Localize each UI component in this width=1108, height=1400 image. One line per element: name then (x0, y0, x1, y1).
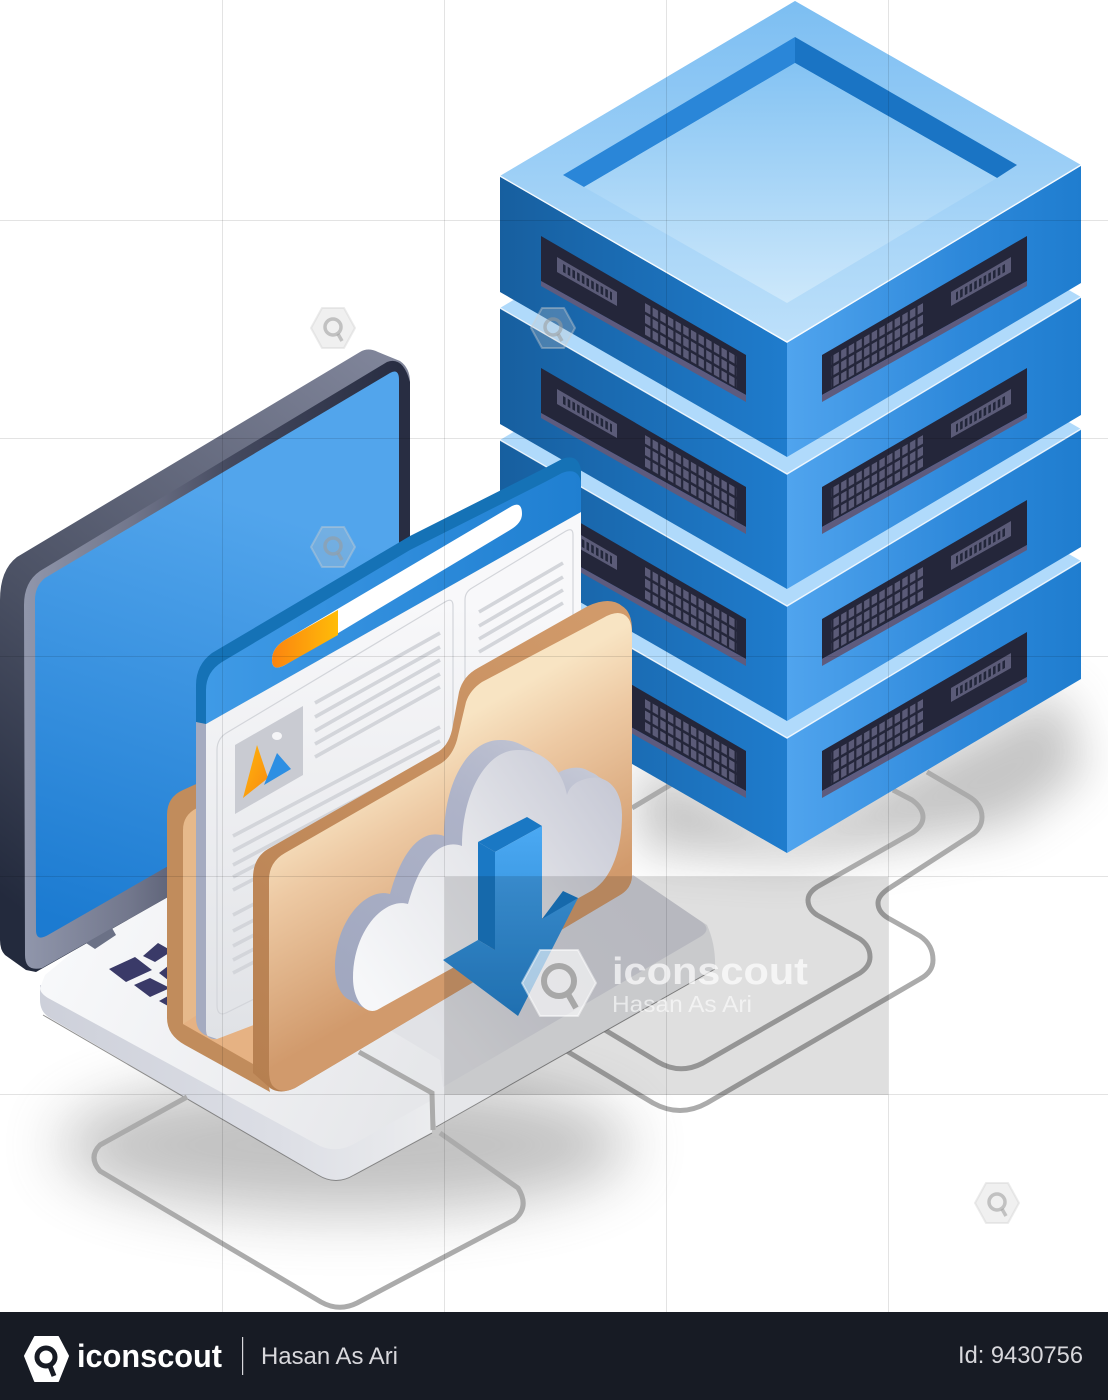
footer id: Id: 9430756 (958, 1342, 1083, 1369)
base edge line (43, 969, 715, 1180)
document folder group (167, 457, 632, 1092)
watermark author: Hasan As Ari (612, 991, 752, 1017)
watermark overlay square (445, 877, 888, 1095)
base side (40, 985, 432, 1180)
footer author: Hasan As Ari (261, 1343, 398, 1370)
footer bar (0, 1312, 1108, 1400)
watermark name: iconscout (612, 951, 808, 993)
address bar (272, 505, 522, 668)
side content panel (465, 530, 573, 760)
laptop monitor (0, 350, 410, 972)
folder shadow on base (390, 875, 707, 1087)
server unit 1 (500, 1, 1081, 457)
window outer band (196, 457, 581, 726)
watermark icon 4 (975, 1183, 1019, 1223)
browser window (196, 457, 581, 1039)
download arrow (443, 817, 578, 1016)
cloud depth (335, 740, 616, 1008)
address bar progress (272, 610, 338, 668)
circuit wires: server (565, 772, 982, 1110)
image thumbnail (235, 706, 303, 814)
folder back panel (167, 780, 270, 1092)
server top face (500, 1, 1081, 342)
wire across the base (359, 1052, 433, 1130)
base top surface (40, 870, 715, 1149)
server stack (500, 1, 1081, 853)
folder front rim (253, 601, 632, 1092)
large watermark hexagon (522, 950, 596, 1016)
footer divider (242, 1337, 243, 1375)
side text lines (479, 563, 563, 652)
server unit 3 (500, 265, 1081, 721)
cloud (335, 740, 622, 1011)
large watermark logo (522, 950, 808, 1017)
laptop base (40, 870, 715, 1180)
server unit 4 (500, 397, 1081, 853)
window side edge (196, 722, 217, 1039)
watermark icon 1 (311, 308, 355, 348)
watermark icon 2 (531, 308, 575, 348)
circuit wire: laptop (94, 1097, 523, 1307)
server unit 2 (500, 133, 1081, 589)
monitor screen (35, 372, 399, 938)
cloud front (353, 750, 622, 1011)
shadow: laptop (60, 1077, 630, 1213)
watermark icon 3 (311, 527, 355, 567)
folder front face (269, 613, 632, 1091)
main text lines (233, 633, 440, 973)
window body (206, 512, 581, 1039)
main content panel (217, 600, 453, 1014)
window header (206, 471, 581, 724)
monitor rear edge (0, 350, 410, 972)
footer logo (25, 1337, 68, 1381)
shadow: server (640, 690, 1085, 860)
keyboard keys (109, 943, 176, 1006)
footer brand: iconscout (77, 1338, 222, 1374)
hinge (86, 928, 116, 949)
monitor frame (24, 361, 410, 969)
